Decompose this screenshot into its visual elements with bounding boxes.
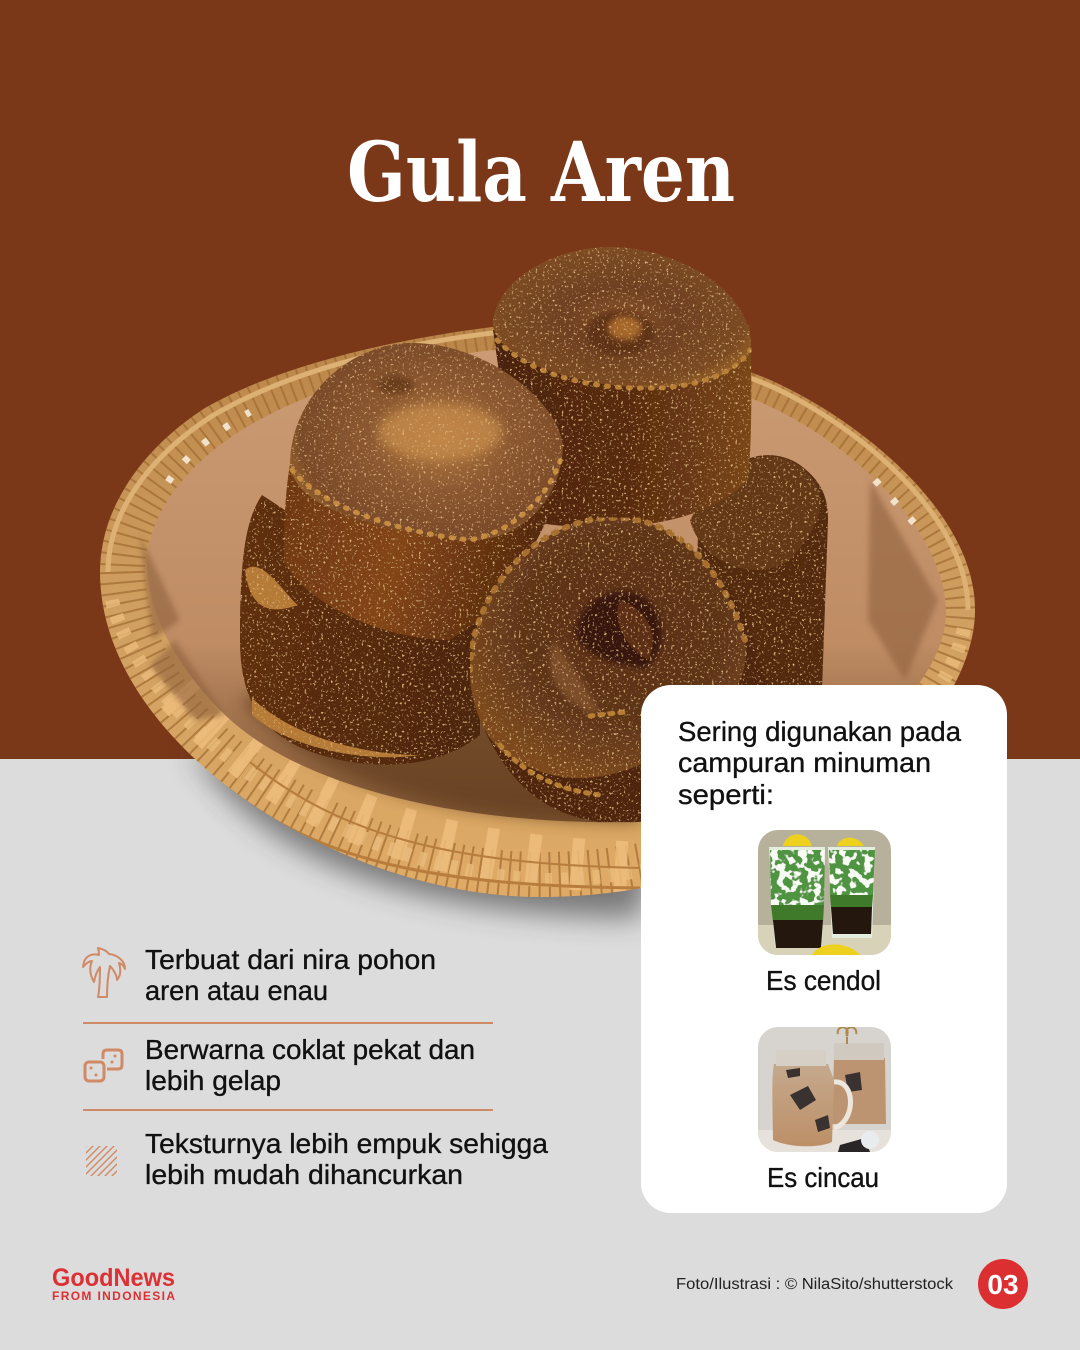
sugar block: lower left [240, 495, 480, 765]
fact text: origin: Terbuat dari nira pohon [145, 944, 436, 975]
icon: palm tree [83, 948, 125, 997]
sugar block: top back [493, 247, 751, 527]
basket shadow [190, 750, 650, 918]
paper folds [140, 480, 938, 720]
bottom shadow inside basket [240, 680, 640, 822]
logo: GoodNews from Indonesia [52, 1264, 175, 1303]
fact text: origin: aren atau enau [145, 975, 328, 1006]
sugar block: back right [690, 455, 828, 690]
rim gaps [168, 412, 925, 535]
card heading: seperti: [678, 779, 774, 810]
photo: es cincau [758, 1027, 891, 1152]
logo: GoodNews from Indonesia: FROM INDONESIA [52, 1289, 175, 1303]
card background [641, 685, 1007, 1213]
fact list [80, 944, 548, 1190]
title: Gula Aren [347, 125, 735, 221]
icon: sugar cubes [85, 1050, 122, 1081]
fact text: texture [145, 1128, 548, 1190]
logo: GoodNews from Indonesia: GoodNews [52, 1264, 175, 1292]
card heading: campuran minuman [678, 747, 931, 778]
fact text: texture: Teksturnya lebih empuk sehigga [145, 1128, 548, 1159]
label: es cendol: Es cendol [766, 965, 881, 996]
card heading: Sering digunakan pada [678, 716, 961, 747]
background: brown upper panel [0, 0, 1080, 759]
fact text: texture: lebih mudah dihancurkan [145, 1159, 463, 1190]
page number badge: 03 [987, 1269, 1019, 1300]
fact text: colour: lebih gelap [145, 1065, 281, 1096]
page number badge [978, 1259, 1028, 1309]
divider [83, 1022, 493, 1024]
fact text: origin [145, 944, 436, 1006]
background: gray lower panel [0, 759, 1080, 1350]
photo: es cendol [758, 830, 891, 955]
label: es cincau: Es cincau [767, 1162, 879, 1193]
photo credit: Foto/Ilustrasi : © NilaSito/shutterstock [676, 1276, 953, 1293]
woven basket [90, 320, 990, 910]
panel: drink uses card [641, 685, 1007, 1213]
card heading [678, 716, 961, 810]
sugar block: front with hollow [470, 518, 770, 822]
icon: texture hatch [86, 1146, 117, 1176]
photo: palm sugar in woven basket [90, 247, 990, 918]
basket inner paper liner [147, 350, 946, 822]
sugar block: large left [284, 343, 563, 640]
fact text: colour [145, 1034, 475, 1096]
divider [83, 1109, 493, 1111]
fact text: colour: Berwarna coklat pekat dan [145, 1034, 475, 1065]
